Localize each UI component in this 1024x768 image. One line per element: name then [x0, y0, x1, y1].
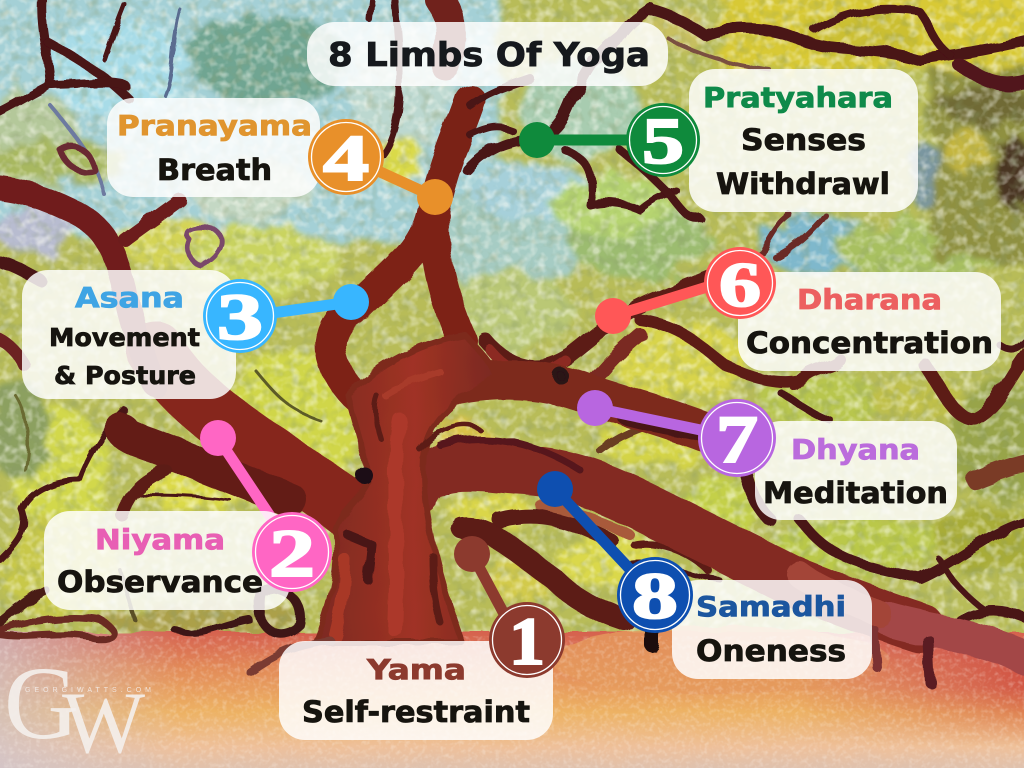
- branches below 5: [565, 150, 675, 210]
- badge 2: 2: [269, 515, 315, 591]
- logo: GW monogram: G: [4, 646, 79, 761]
- panel: limb 5 Pratyahara: Withdrawl: [716, 167, 890, 201]
- badge 5: 5: [642, 105, 684, 178]
- left big limb: [155, 350, 350, 510]
- badge 6: 6: [719, 249, 761, 320]
- panel: limb 1 Yama: Yama: [366, 653, 466, 686]
- dot markers on branches: [200, 122, 631, 572]
- branch to dot 6: [485, 275, 715, 367]
- badge 4: [308, 119, 384, 195]
- big right lower limb: [415, 466, 920, 628]
- panel: limb 4 Pranayama: Pranayama: [117, 109, 312, 142]
- left: [220, 350, 360, 490]
- root at base: [250, 640, 330, 672]
- badge 8: [617, 557, 693, 633]
- sky and upper left: [0, 0, 500, 240]
- panel: limb 1 Yama: Self-restraint: [302, 695, 530, 729]
- badge 1: 1: [509, 603, 545, 679]
- panel: limb 7 Dhyana: Dhyana: [791, 433, 920, 466]
- panel: limb 3 Asana: Asana: [75, 281, 184, 314]
- panel: limb 2 Niyama: [44, 511, 290, 610]
- panel: limb 5 Pratyahara: Pratyahara: [703, 81, 893, 114]
- panel: limb 7 Dhyana: Meditation: [763, 476, 948, 510]
- lower right network: [590, 335, 640, 385]
- logo: GW monogram: [4, 646, 155, 768]
- panel: limb 8 Samadhi: Samadhi: [696, 590, 846, 623]
- badge 4: 4: [323, 122, 369, 195]
- panel: limb 8 Samadhi: Oneness: [696, 634, 846, 668]
- middle right limb: [430, 380, 705, 432]
- panel: limb 3 Asana: & Posture: [54, 361, 196, 390]
- panel: limb 6 Dharana: Dharana: [797, 283, 942, 316]
- left lower network: [0, 340, 24, 365]
- logo: GW monogram: GEORGIWATTS.COM: [25, 687, 155, 694]
- badge 6: [704, 247, 776, 320]
- panel: limb 5 Pratyahara: [689, 69, 918, 212]
- panel: limb 2 Niyama: Observance: [57, 565, 263, 599]
- panel: limb 7 Dhyana: [755, 421, 957, 520]
- panel: limb 3 Asana: [22, 270, 236, 399]
- badge 1: [489, 602, 565, 679]
- panel: limb 6 Dharana: [738, 272, 1001, 371]
- badge 3: 3: [217, 281, 263, 354]
- badge 7: [698, 399, 776, 477]
- badge 8: 8: [632, 560, 678, 633]
- panel: title: [307, 22, 668, 86]
- panel: limb 8 Samadhi: [672, 580, 872, 679]
- upper left: [0, 0, 50, 112]
- badge 3: [203, 279, 277, 354]
- upper right main: [650, 10, 1024, 60]
- branch under limb: [462, 528, 625, 620]
- main trunk: [315, 335, 495, 642]
- panel: limb 4 Pranayama: [107, 98, 320, 197]
- badge 2: [252, 512, 332, 592]
- upper limbs: [435, 100, 470, 205]
- mid right: [610, 320, 750, 400]
- ground: [0, 626, 1024, 768]
- panel: title: 8 Limbs Of Yoga: [328, 35, 650, 74]
- badge 7: 7: [716, 401, 758, 477]
- panel: limb 1 Yama: [279, 641, 553, 740]
- panel: limb 3 Asana: Movement: [49, 323, 200, 352]
- panel: limb 5 Pratyahara: Senses: [741, 123, 866, 157]
- connector lines: [218, 140, 720, 625]
- upper right yellow: [720, 0, 1024, 70]
- centre: [440, 180, 580, 300]
- badge 5: [626, 103, 700, 178]
- panel: limb 2 Niyama: Niyama: [95, 523, 225, 556]
- panel: limb 6 Dharana: Concentration: [746, 326, 993, 360]
- panel: limb 4 Pranayama: Breath: [157, 153, 272, 187]
